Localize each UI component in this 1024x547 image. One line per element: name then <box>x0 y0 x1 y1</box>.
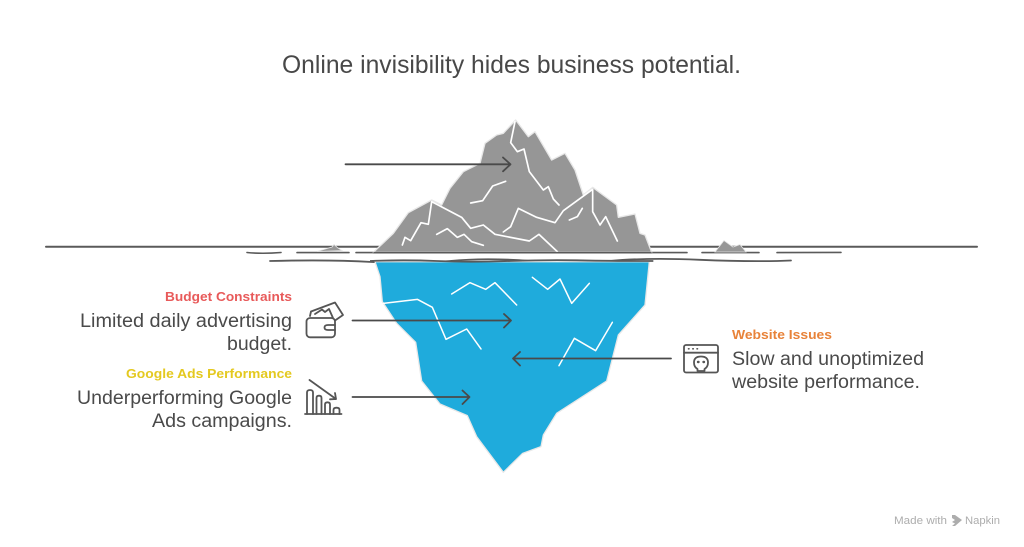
text block: budget constraints <box>80 289 292 355</box>
body: website issues: website performance. <box>731 372 920 393</box>
small iceberg right <box>715 240 746 252</box>
body: google ads performance <box>77 388 292 432</box>
title: Online invisibility hides business potential. <box>282 51 741 79</box>
icon: wallet with money <box>306 302 343 337</box>
arrow: budget constraints <box>352 314 511 328</box>
heading: budget constraints: Budget Constraints <box>165 289 292 304</box>
iceberg below water <box>370 260 653 472</box>
arrow: google ads performance <box>352 390 470 404</box>
body: budget constraints <box>80 311 292 355</box>
arrow: website issues <box>513 352 671 366</box>
heading: google ads performance: Google Ads Performance <box>126 366 292 381</box>
line across the iceberg base <box>373 250 652 255</box>
footer: made with napkin: Made with <box>894 515 947 527</box>
arrow: top of iceberg <box>346 158 510 171</box>
waterline <box>46 247 977 263</box>
footer: made with napkin <box>894 515 1000 527</box>
mountain cracks <box>402 122 617 252</box>
body: google ads performance: Underperforming Google <box>77 388 292 409</box>
surface line <box>370 260 653 262</box>
icon: napkin logo <box>952 515 962 526</box>
icon: browser window with skull <box>684 345 718 372</box>
icon: declining bar chart <box>305 380 342 414</box>
small iceberg left <box>317 244 342 252</box>
body: website issues <box>731 349 924 393</box>
heading: website issues: Website Issues <box>732 327 832 342</box>
iceberg above water <box>373 120 652 253</box>
mountain body <box>373 120 652 252</box>
text block: google ads performance <box>77 366 292 432</box>
body: website issues: Slow and unoptimized <box>732 349 924 370</box>
submerged body <box>375 262 649 472</box>
body: google ads performance: Ads campaigns. <box>152 411 292 432</box>
body: budget constraints: Limited daily advertising <box>80 311 292 332</box>
text block: website issues <box>731 327 924 393</box>
body: budget constraints: budget. <box>227 334 292 355</box>
submerged cracks <box>383 277 612 366</box>
footer: made with napkin: Napkin <box>965 515 1000 527</box>
